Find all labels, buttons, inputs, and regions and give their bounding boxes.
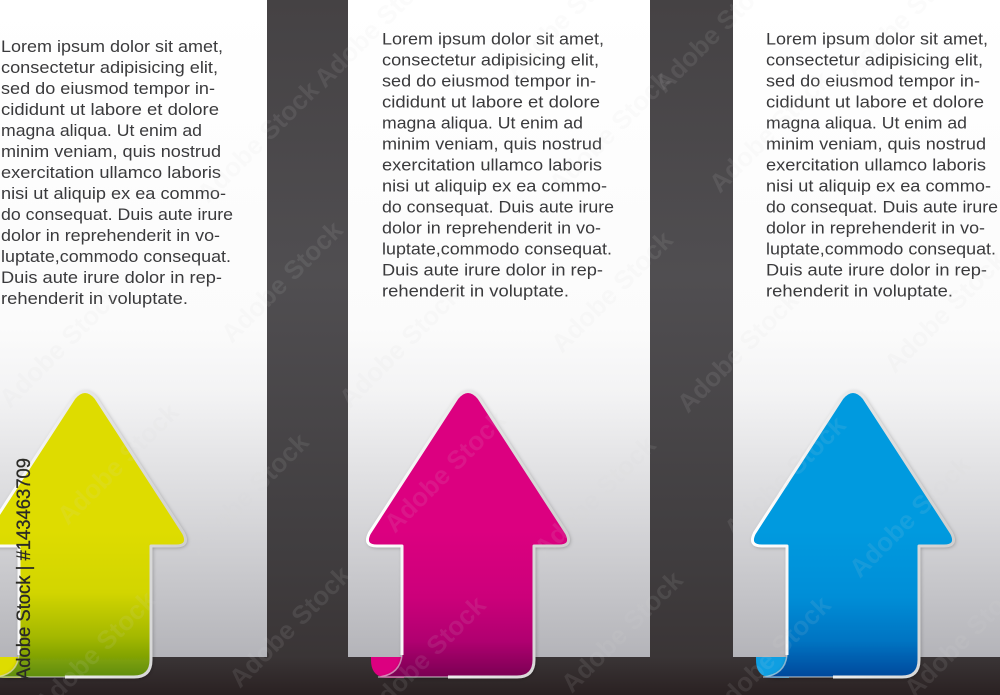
text block: middle: sed do eiusmod tempor in- — [382, 72, 596, 90]
text block: middle: consectetur adipisicing elit, — [382, 52, 599, 70]
text block: left: consectetur adipisicing elit, — [1, 59, 218, 77]
text block: middle: nisi ut aliquip ex ea commo- — [382, 178, 607, 196]
text block: left — [1, 38, 233, 308]
text block: left: nisi ut aliquip ex ea commo- — [1, 185, 226, 203]
text block: middle: luptate,commodo consequat. — [382, 240, 612, 258]
text block: right: dolor in reprehenderit in vo- — [766, 220, 985, 238]
text block: left: minim veniam, quis nostrud — [1, 143, 221, 161]
watermarks: Adobe Stock — [378, 404, 512, 538]
watermarks: Adobe Stock — [718, 409, 852, 543]
panel: right banner — [733, 0, 1000, 657]
text block: left: luptate,commodo consequat. — [1, 248, 231, 266]
text block: middle: rehenderit in voluptate. — [382, 282, 569, 300]
text block: middle: Lorem ipsum dolor sit amet, — [382, 30, 604, 48]
yellow curl highlight — [0, 655, 65, 677]
panel: middle banner — [348, 0, 650, 657]
text block: middle: Duis aute irure dolor in rep- — [382, 262, 603, 280]
icon: blue arrow — [752, 392, 954, 678]
watermarks: Adobe Stock — [51, 396, 185, 530]
icon: magenta arrow — [367, 392, 569, 678]
blue arrow body — [752, 392, 954, 678]
text block: left: Lorem ipsum dolor sit amet, — [1, 38, 223, 56]
watermarks: Adobe Stock — [555, 564, 689, 695]
text block: right: exercitation ullamco laboris — [766, 156, 986, 174]
text block: middle — [382, 30, 614, 300]
text block: right: Duis aute irure dolor in rep- — [766, 262, 987, 280]
text block: left: rehenderit in voluptate. — [1, 290, 188, 308]
text block: left: exercitation ullamco laboris — [1, 164, 221, 182]
text block: left: do consequat. Duis aute irure — [1, 206, 233, 224]
watermarks: Adobe Stock — [543, 64, 677, 198]
watermarks: Adobe Stock — [703, 64, 837, 198]
text block: right: Lorem ipsum dolor sit amet, — [766, 30, 988, 48]
text block: right: consectetur adipisicing elit, — [766, 52, 983, 70]
watermarks: Adobe Stock — [191, 74, 325, 208]
magenta arrow body — [367, 392, 569, 678]
text block: middle: minim veniam, quis nostrud — [382, 136, 602, 154]
text block: left: Duis aute irure dolor in rep- — [1, 269, 222, 287]
text block: middle: exercitation ullamco laboris — [382, 156, 602, 174]
watermarks: Adobe Stock — [843, 449, 977, 583]
magenta arrow edge — [367, 392, 569, 677]
text block: middle: do consequat. Duis aute irure — [382, 198, 614, 216]
watermarks: Adobe Stock — [215, 214, 349, 348]
blue arrow edge — [752, 392, 954, 677]
text block: right: rehenderit in voluptate. — [766, 282, 953, 300]
yellow arrow body — [0, 392, 186, 678]
text block: left: cididunt ut labore et dolore — [1, 101, 219, 119]
watermarks: Adobe Stock — [181, 426, 315, 560]
icon: yellow arrow — [0, 392, 186, 678]
text block: right: magna aliqua. Ut enim ad — [766, 114, 967, 132]
text block: right: sed do eiusmod tempor in- — [766, 72, 980, 90]
text block: right: do consequat. Duis aute irure — [766, 198, 998, 216]
panel: left banner — [0, 0, 267, 657]
blue curled tail — [756, 657, 789, 678]
watermarks: Adobe Stock — [545, 224, 679, 358]
magenta curled tail — [371, 657, 404, 678]
text block: middle: magna aliqua. Ut enim ad — [382, 114, 583, 132]
text block: left: magna aliqua. Ut enim ad — [1, 122, 202, 140]
yellow curled tail — [0, 657, 21, 678]
text block: right — [766, 30, 998, 300]
text block: left: sed do eiusmod tempor in- — [1, 80, 215, 98]
text block: middle: dolor in reprehenderit in vo- — [382, 220, 601, 238]
watermarks: Adobe Stock — [671, 284, 805, 418]
watermarks: Adobe Stock — [333, 279, 467, 413]
watermarks: Adobe Stock — [223, 559, 357, 693]
watermarks: Adobe Stock — [528, 429, 662, 563]
text block: right: nisi ut aliquip ex ea commo- — [766, 178, 991, 196]
stock id label: Adobe Stock | #143463709 — [13, 458, 35, 680]
text block: left: dolor in reprehenderit in vo- — [1, 227, 220, 245]
text block: middle: cididunt ut labore et dolore — [382, 94, 600, 112]
magenta curl highlight — [378, 655, 448, 677]
text block: right: cididunt ut labore et dolore — [766, 94, 984, 112]
text block: right: luptate,commodo consequat. — [766, 240, 996, 258]
yellow arrow edge — [0, 392, 186, 677]
blue curl highlight — [763, 655, 833, 677]
text block: right: minim veniam, quis nostrud — [766, 136, 986, 154]
